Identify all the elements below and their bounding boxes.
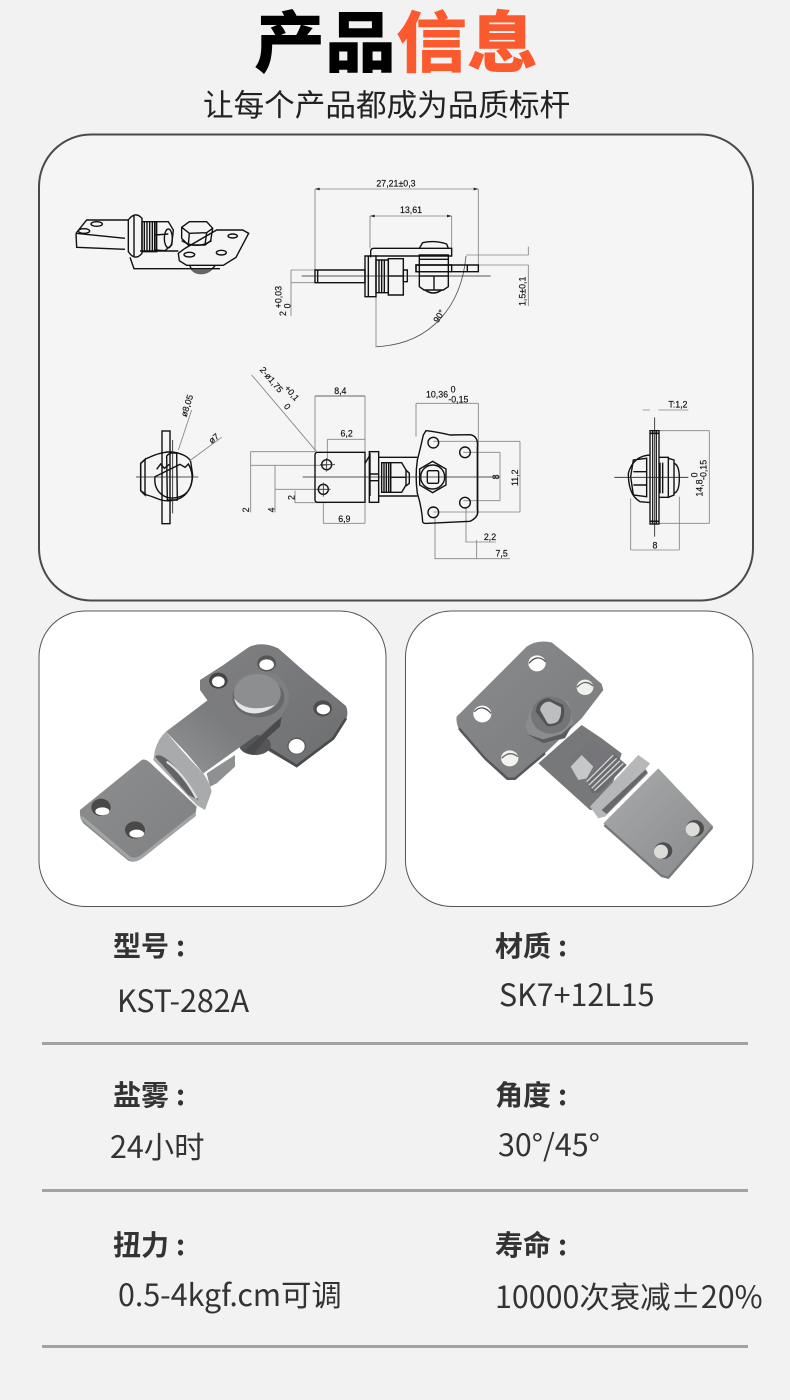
spec: angle: 角度: — [495, 1074, 567, 1114]
drawing: end view left: ø8,05 — [179, 393, 195, 418]
spec: salt spray: 24小时 — [110, 1123, 205, 1167]
drawing: front view with dimensions: 4 — [266, 507, 276, 512]
drawing: end view right with dimensions: 0 — [689, 472, 699, 477]
panel: product photo, front side — [406, 611, 753, 906]
drawing: end view right with dimensions: T:1,2 — [668, 400, 688, 410]
spec: service life — [495, 1224, 763, 1317]
spec: service life: 寿命: — [495, 1224, 567, 1264]
panel: technical drawings — [39, 134, 753, 600]
drawing: end view right with dimensions — [614, 400, 709, 550]
drawing: end view right with dimensions: 14,8 — [694, 479, 704, 497]
drawing: front view with dimensions: 8 — [491, 474, 501, 479]
drawing: end view right with dimensions: -0,15 — [699, 460, 709, 480]
drawing: front view with dimensions: 11,2 — [510, 469, 520, 486]
divider — [42, 1345, 748, 1348]
spec: torque: 扭力: — [113, 1224, 185, 1264]
drawing: top view with dimensions: 13,61 — [400, 205, 422, 215]
divider — [42, 1189, 748, 1192]
drawing: end view left: ø7 — [207, 431, 221, 446]
spec: model: 型号: — [113, 925, 185, 965]
drawing: top view with dimensions — [273, 179, 528, 347]
drawing: end view left — [136, 393, 222, 524]
drawing: front view with dimensions: 7,5 — [496, 549, 508, 559]
drawing: top view with dimensions: 90° — [431, 308, 447, 324]
drawing: front view with dimensions: 0 — [282, 402, 293, 412]
drawing: front view with dimensions: 6,9 — [338, 514, 351, 524]
spec: model — [113, 925, 250, 1021]
spec: material: 材质: — [495, 925, 567, 965]
spec: material — [495, 925, 654, 1015]
drawing: front view with dimensions: +0,1 — [282, 383, 301, 403]
drawing: top view with dimensions: +0,03 — [273, 286, 283, 308]
photo: hinge back view — [80, 644, 347, 862]
drawing: front view with dimensions: 2 — [241, 507, 251, 512]
panel: product photo, back side — [39, 611, 386, 906]
spec: service life: 10000次衰减±20% — [495, 1273, 763, 1317]
drawing: end view right with dimensions: 8 — [653, 540, 658, 550]
spec: angle — [495, 1074, 600, 1165]
spec: angle: 30°/45° — [498, 1121, 600, 1165]
drawing: front view with dimensions: 2-ø1,75 — [258, 365, 285, 395]
subtitle: 让每个产品都成为品质标杆 — [203, 81, 570, 125]
drawing: front view with dimensions: 0 — [451, 385, 456, 395]
spec: salt spray — [110, 1074, 205, 1167]
drawing: front view with dimensions: 6,2 — [341, 428, 353, 438]
drawing: top view with dimensions: 27,21±0,3 — [376, 179, 416, 189]
drawing: front view with dimensions — [241, 365, 520, 559]
drawing: front view with dimensions: 2,2 — [484, 532, 496, 542]
drawing: front view with dimensions: 8,4 — [334, 386, 347, 396]
spec: torque: 0.5-4kgf.cm可调 — [118, 1271, 342, 1315]
drawing: front view with dimensions: 2 — [286, 495, 296, 500]
drawing: front view with dimensions: 10,36 — [426, 389, 448, 399]
spec: salt spray: 盐雾: — [113, 1074, 185, 1114]
spec: material: SK7+12L15 — [499, 971, 654, 1015]
drawing: front view with dimensions: -0,15 — [448, 394, 469, 404]
drawing: isometric view — [76, 215, 249, 274]
spec: model: KST-282A — [117, 977, 250, 1021]
divider — [42, 1042, 748, 1045]
drawing: top view with dimensions: 1,5±0,1 — [517, 277, 527, 306]
drawing: top view with dimensions: 0 — [283, 303, 293, 308]
drawing: top view with dimensions: 2 — [278, 311, 288, 316]
photo: hinge front view — [456, 641, 713, 878]
spec: torque — [113, 1224, 342, 1315]
